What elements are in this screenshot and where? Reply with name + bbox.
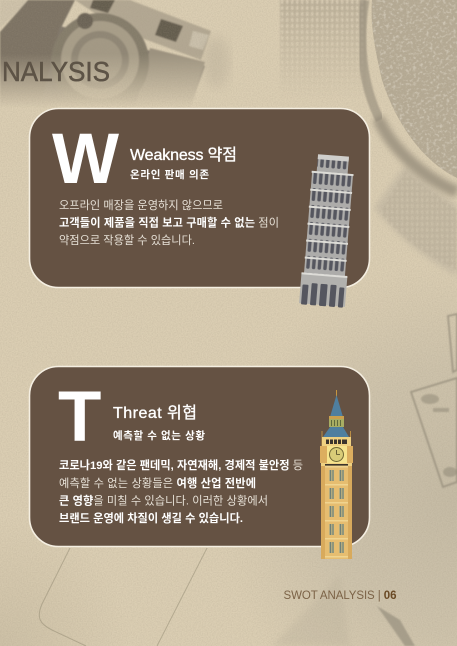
panel: threat — [30, 366, 370, 559]
body text — [59, 198, 279, 247]
straw hat crown — [372, 0, 457, 178]
panel background — [30, 108, 370, 288]
body text — [59, 458, 303, 525]
big letter T: T — [58, 378, 101, 457]
body text: 고객들이 제품을 직접 보고 구매할 수 없는 점이 — [59, 216, 279, 230]
body text: 예측할 수 없는 상황들은 여행 산업 전반에 — [59, 476, 256, 490]
section title: NALYSIS — [2, 56, 110, 87]
heading: Threat: Threat 위협 — [113, 404, 197, 422]
body text: 브랜드 운영에 차질이 생길 수 있습니다. — [59, 511, 243, 525]
card outlines lower left — [39, 548, 207, 646]
body text: 약점으로 작용할 수 있습니다. — [59, 233, 195, 247]
straw hat brim — [280, 0, 366, 75]
footer page label: SWOT ANALYSIS | 06 — [284, 590, 396, 602]
body text: 오프라인 매장을 운영하지 않으므로 — [59, 198, 223, 212]
camera photo — [0, 0, 211, 111]
subheading: 온라인 판매 의존 — [130, 168, 209, 181]
icon: Big Ben clock tower — [320, 390, 353, 559]
lower right paper tones — [200, 250, 457, 646]
big letter W: W — [52, 120, 119, 199]
paper plane shape — [377, 606, 415, 646]
panel background — [30, 366, 370, 546]
subheading: 예측할 수 없는 상황 — [113, 429, 205, 442]
body text: 코로나19와 같은 팬데믹, 자연재해, 경제적 불안정 등 — [59, 458, 303, 472]
body text: 큰 영향을 미칠 수 있습니다. 이러한 상황에서 — [59, 494, 268, 508]
hat band shadow — [362, 0, 380, 120]
heading: Weakness: Weakness 약점 — [130, 146, 237, 164]
banknotes — [411, 314, 457, 487]
panel: weakness — [30, 108, 370, 308]
icon: leaning tower of Pisa — [299, 154, 357, 308]
